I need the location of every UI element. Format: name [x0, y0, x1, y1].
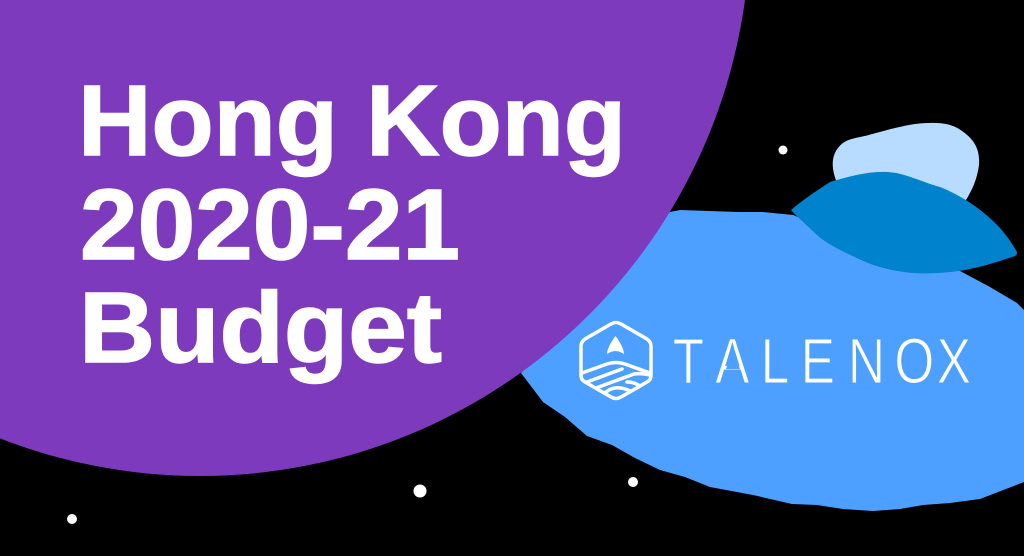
purple circle [0, 0, 750, 476]
title: Budget [79, 272, 442, 384]
Talenox wordmark: TALENOX [673, 327, 971, 397]
star dots [67, 146, 788, 524]
title: 2020-21 [80, 169, 460, 281]
light blue blob [833, 123, 979, 215]
title [78, 65, 626, 384]
Talenox logo icon [581, 322, 651, 398]
dark blue blob [791, 172, 1017, 273]
blue blob [521, 210, 1024, 511]
title: Hong Kong [78, 65, 626, 177]
